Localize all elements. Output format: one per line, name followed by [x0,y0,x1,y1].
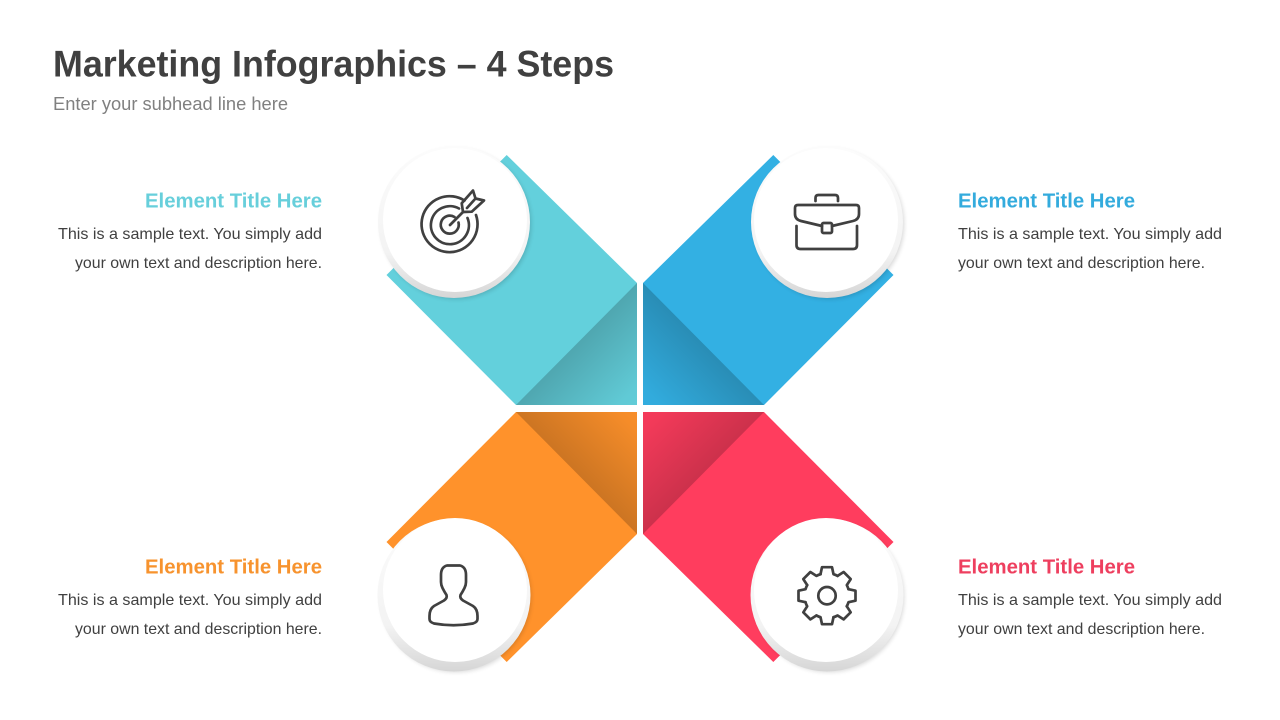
title: Marketing Infographics – 4 Steps [53,44,614,84]
icon: briefcase [795,195,859,249]
text block: bottom left: Element Title Here [145,556,322,578]
circle badge: briefcase [751,146,904,299]
circle badge: gear [750,518,904,672]
text block: top left [58,190,322,272]
panel: red arrow [643,412,894,662]
icon: gear [798,567,856,624]
circle badge: target [378,146,531,299]
text block: top left: your own text and description here. [75,255,322,272]
text block: top right [958,190,1222,272]
text block: bottom right [958,556,1222,638]
text block: top left: Element Title Here [145,190,322,212]
text block: bottom left: your own text and description here. [75,621,322,638]
text block: bottom right: your own text and description here. [958,621,1205,638]
icon: target with arrow [422,190,484,252]
text block: bottom right: Element Title Here [958,556,1135,578]
panel: orange arrow [386,412,637,662]
text block: top left: This is a sample text. You simply add [58,226,322,243]
panel: teal arrow [386,155,637,405]
text block: top right: This is a sample text. You simply add [958,226,1222,243]
text block: bottom left: This is a sample text. You simply add [58,592,322,609]
circle badge: person [378,518,531,672]
text block: bottom left [58,556,322,638]
text block: top right: Element Title Here [958,190,1135,212]
text block: bottom right: This is a sample text. You simply add [958,592,1222,609]
panel: blue arrow [643,155,894,405]
icon: person [430,566,478,625]
text block: top right: your own text and description here. [958,255,1205,272]
subhead: Enter your subhead line here [53,94,288,114]
